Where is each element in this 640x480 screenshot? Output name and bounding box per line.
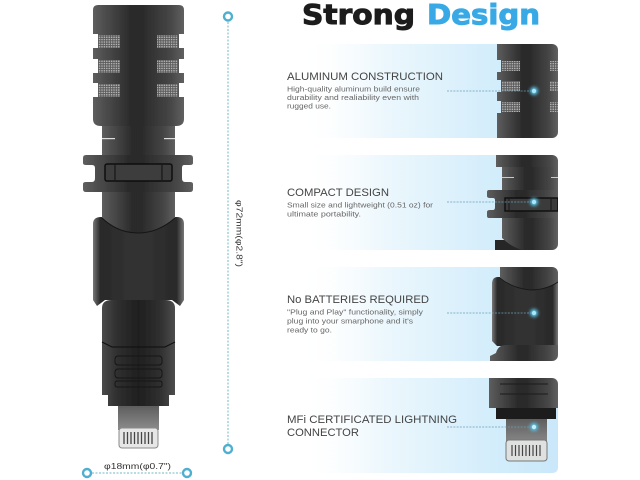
panel: aluminum construction [287,44,558,138]
title [302,0,540,31]
description: "Plug and Play" functionality, simply [287,308,423,316]
heading: No BATTERIES REQUIRED [287,294,429,306]
shoe mount clip [83,155,193,192]
height dimension line [224,12,244,453]
description: ultimate portability. [287,210,361,218]
swivel joint [93,217,184,306]
close-up: microphone head [497,44,558,138]
description [287,308,423,334]
lightning plug [118,406,159,448]
description [287,84,420,110]
close-up: lightning plug [489,378,558,461]
description: plug into your smarphone and it's [287,316,413,326]
description: High-quality aluminum build ensure [287,84,420,94]
upper neck [102,126,175,156]
microphone illustration [83,5,193,448]
heading: ALUMINUM CONSTRUCTION [287,71,443,83]
heading: MFi CERTIFICATED LIGHTNING [287,414,457,426]
heading: COMPACT DESIGN [287,187,389,199]
description: Small size and lightweight (0.51 oz) for [287,200,434,210]
heading: CONNECTOR [287,427,359,439]
width dimension line [83,461,191,477]
callout marker [447,423,538,431]
connector body [102,300,175,406]
description: durability and realiability even with [287,93,419,102]
callout marker [447,198,538,206]
close-up: clip mount [487,155,558,250]
panel: no batteries required [287,267,558,361]
description: ready to go. [287,326,332,334]
height label: φ72mm(φ2.8") [234,200,244,267]
microphone head [93,5,184,126]
width label: φ18mm(φ0.7") [104,461,171,471]
description [287,200,434,218]
callout marker [447,87,538,95]
heading [287,414,457,439]
callout marker [447,309,538,317]
panel: lightning connector [287,378,558,473]
lower neck [102,192,175,233]
close-up: swivel joint [490,267,558,361]
panel: compact design [287,155,558,250]
description: rugged use. [287,102,331,110]
